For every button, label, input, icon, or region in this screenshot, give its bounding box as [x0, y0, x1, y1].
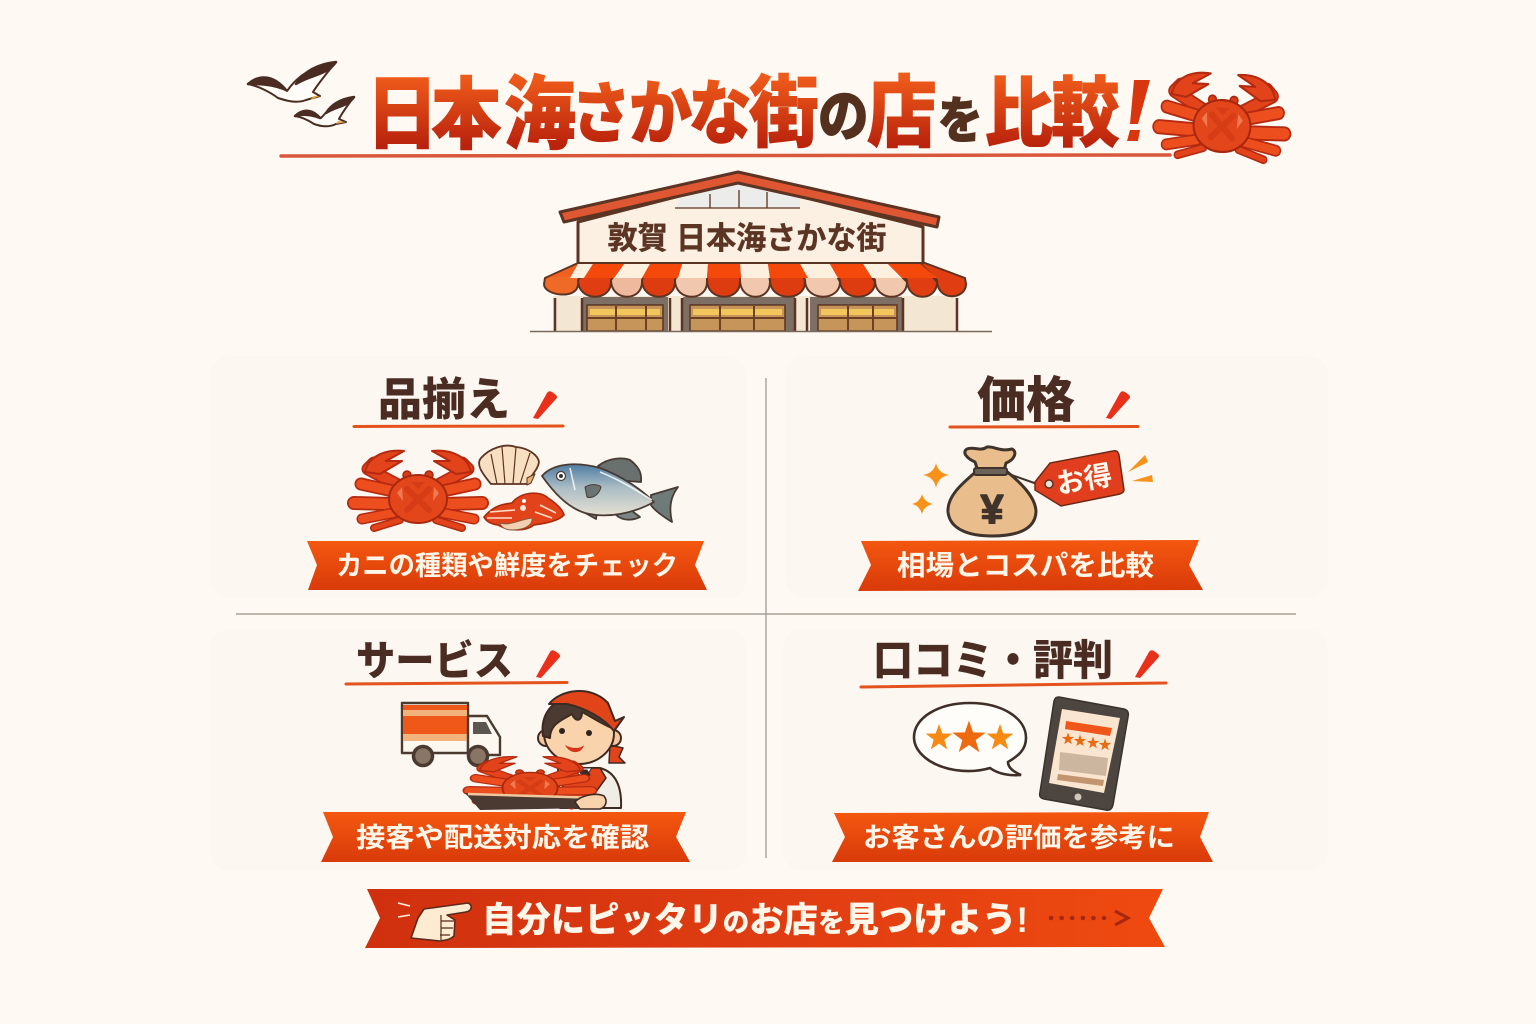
title: を	[938, 94, 983, 150]
title	[366, 70, 1150, 160]
title: 日	[366, 71, 438, 160]
panel: 品揃え background	[210, 356, 747, 598]
icon: money bag with yen: ¥	[981, 486, 1004, 532]
panel: 口コミ・評判	[832, 637, 1213, 862]
icon: seagulls	[248, 62, 354, 126]
ribbon サービス	[321, 812, 690, 862]
accent tick	[533, 391, 557, 419]
icon: snow crab	[354, 451, 482, 528]
panel: サービス	[321, 638, 690, 862]
icon: money bag with yen	[948, 447, 1040, 536]
ribbon 価格: 相場とコスパを比較	[897, 550, 1154, 581]
panel: 口コミ・評判 background	[783, 629, 1328, 871]
accent tick	[536, 650, 560, 678]
ribbon 口コミ・評判: お客さんの評価を参考に	[863, 823, 1175, 853]
title: 街	[749, 70, 819, 157]
title: 本	[431, 72, 501, 159]
icon: pointing hand	[398, 903, 471, 941]
icon: title crab	[1158, 70, 1287, 161]
dotted arrow	[1051, 911, 1128, 925]
ribbon サービス: 接客や配送対応を確認	[356, 823, 649, 853]
icon: speech bubble with stars	[914, 703, 1026, 775]
ribbon 価格	[858, 540, 1203, 591]
icon: お得 price tag: お得	[1054, 459, 1115, 500]
panel: サービス background	[210, 629, 747, 871]
heading 品揃え: 品揃え	[378, 374, 510, 425]
striped awning	[544, 263, 966, 297]
title: さ	[572, 78, 631, 152]
icon: scallop shell	[479, 446, 539, 485]
ribbon 口コミ・評判	[832, 812, 1213, 862]
icon: tray of crab	[465, 757, 606, 810]
storefront base	[553, 296, 957, 331]
panel: 品揃え	[307, 374, 707, 590]
icon: fish	[542, 458, 678, 522]
icon: sparkles	[912, 455, 1153, 514]
heading underline	[950, 425, 1138, 428]
heading サービス: サービス	[356, 638, 513, 684]
store illustration	[530, 172, 992, 332]
ribbon 品揃え: カニの種類や鮮度をチェック	[336, 551, 678, 581]
heading underline	[346, 682, 567, 684]
icon: crab meat	[484, 493, 564, 530]
title: の	[818, 87, 868, 149]
icon: delivery truck	[402, 703, 500, 766]
banner text: 自分にピッタリのお店を見つけよう!	[482, 901, 1028, 940]
title: 較	[1051, 73, 1120, 157]
title: 海	[504, 71, 576, 160]
title underline	[281, 155, 1170, 156]
panel: 価格	[858, 374, 1203, 591]
accent tick	[1106, 391, 1130, 419]
panel: 価格 background	[785, 356, 1328, 598]
icon: お得 price tag	[1035, 451, 1124, 506]
heading underline	[354, 424, 563, 428]
icon: tablet with reviews	[1040, 697, 1128, 810]
ribbon 品揃え	[307, 541, 707, 590]
heading 価格: 価格	[977, 374, 1075, 428]
title: 店	[867, 70, 937, 157]
title: 比	[985, 73, 1053, 157]
title: か	[629, 76, 692, 154]
bottom call-to-action banner	[365, 889, 1165, 948]
heading 口コミ・評判: 口コミ・評判	[873, 637, 1113, 684]
heading underline	[861, 683, 1166, 687]
title: な	[688, 76, 752, 154]
icon: smiling fishmonger	[538, 691, 625, 808]
accent tick	[1135, 650, 1159, 678]
store sign text: 敦賀 日本海さかな街	[608, 221, 886, 256]
